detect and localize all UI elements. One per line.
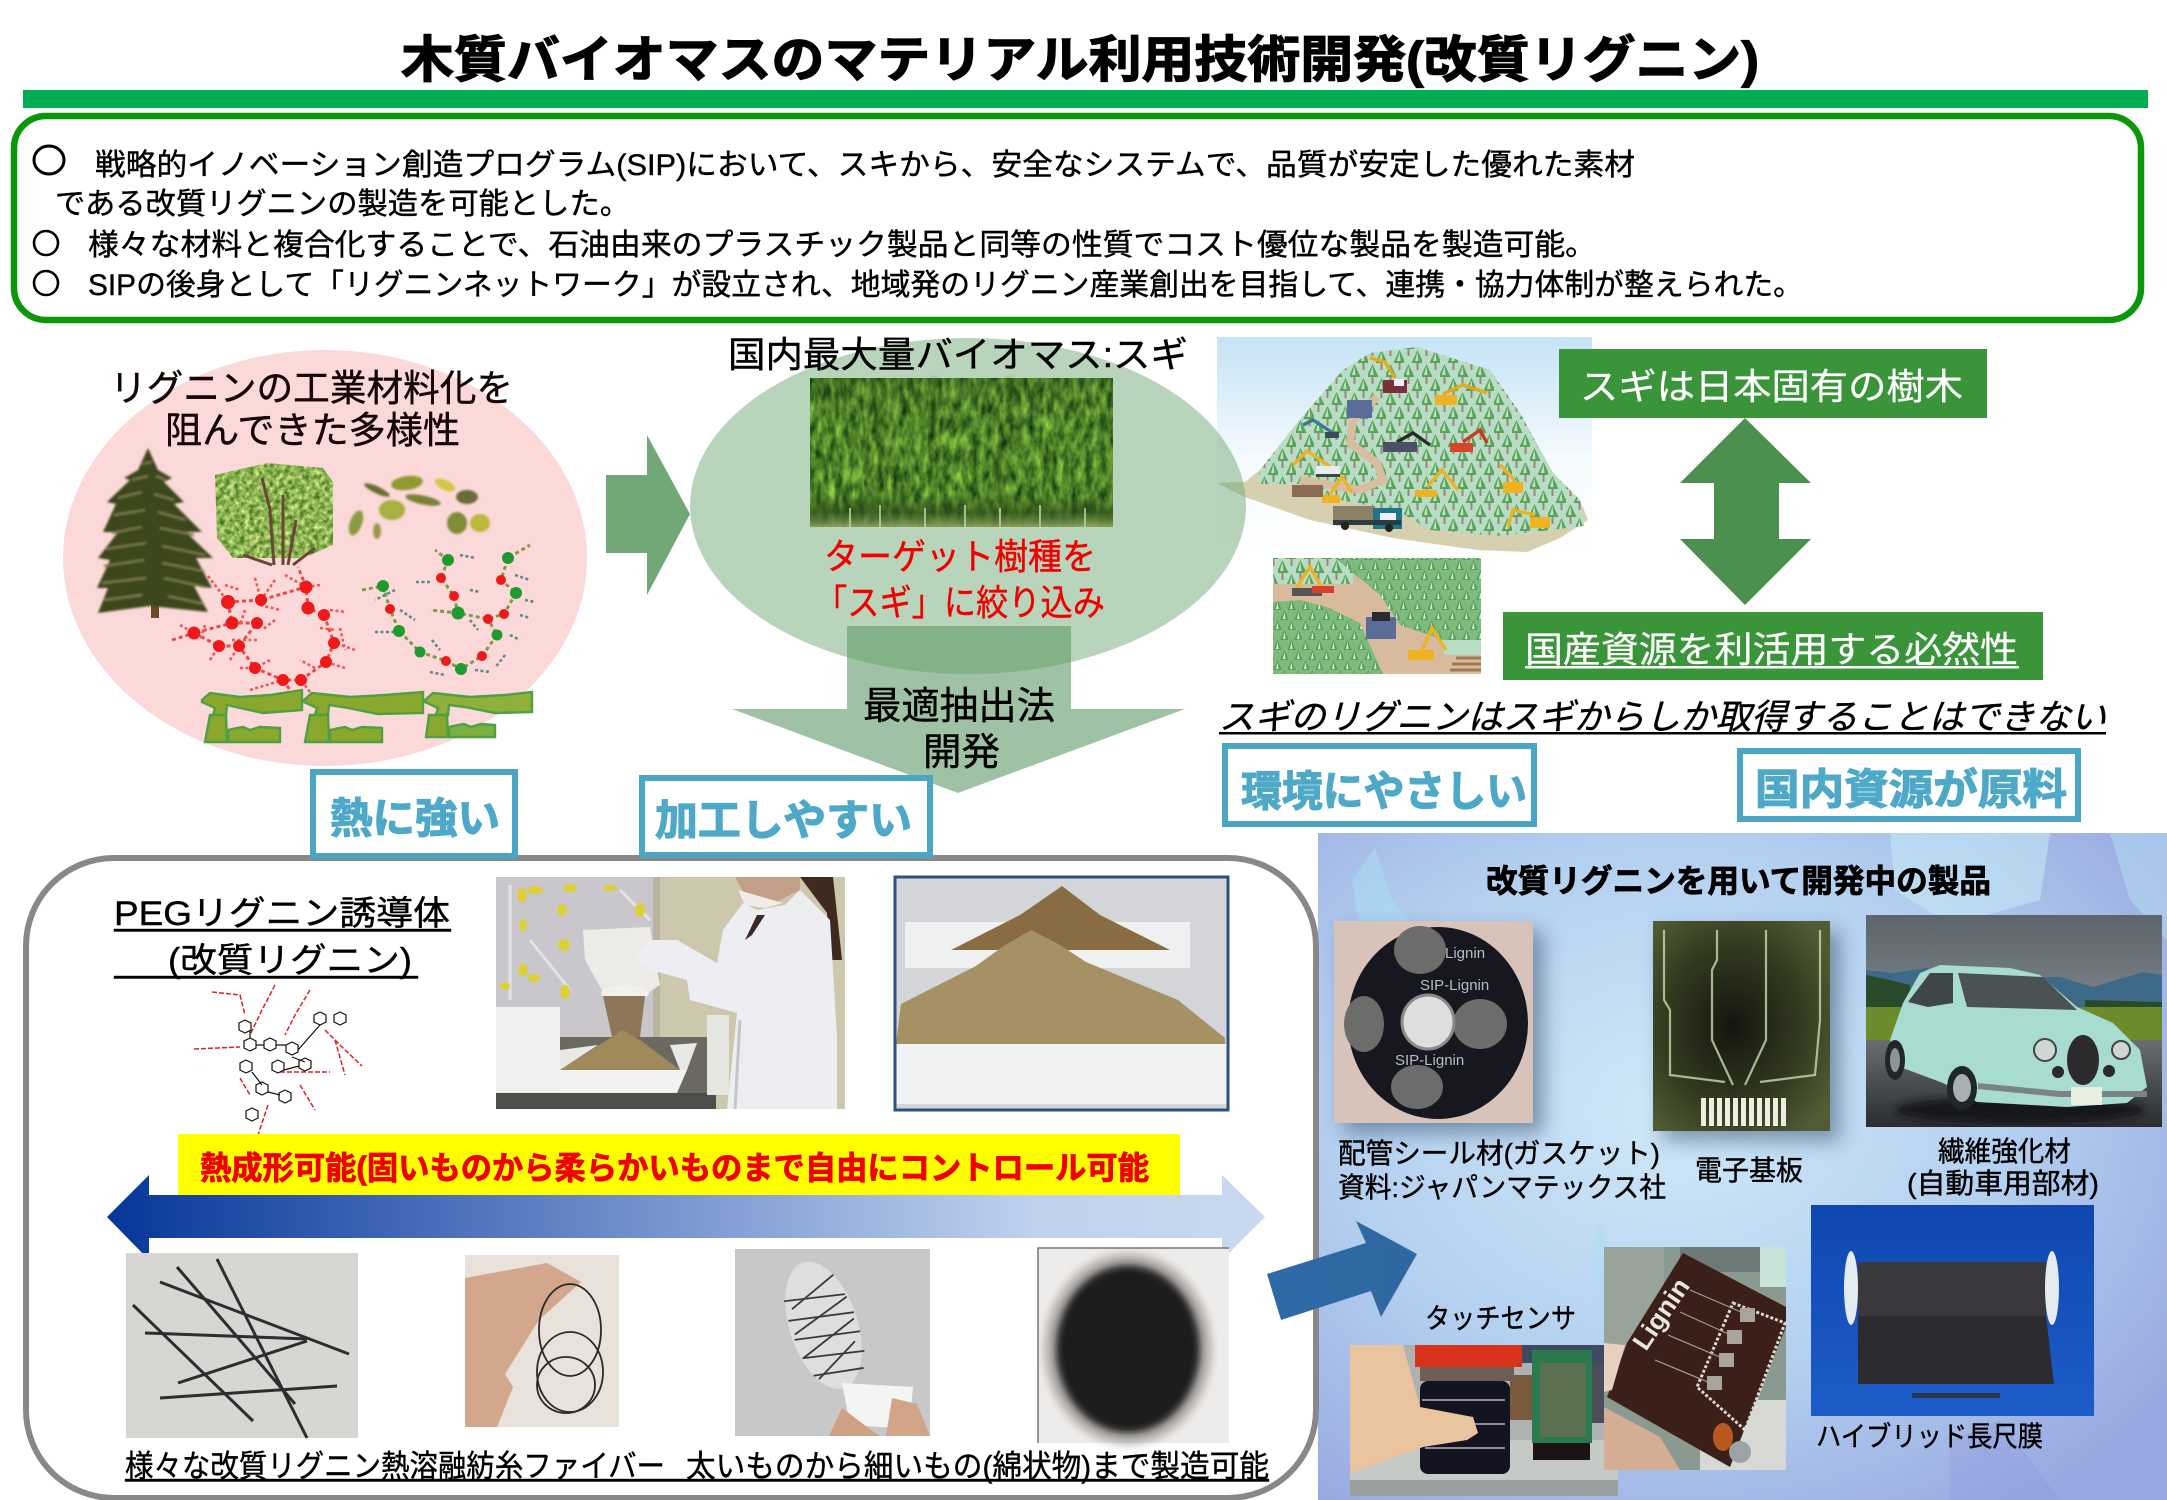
arrow: to Sugi <box>606 435 690 595</box>
photo: short fibers <box>126 1253 358 1438</box>
truck <box>1333 506 1402 532</box>
caption: fibers <box>125 1449 1269 1484</box>
photo shadows <box>1344 931 1840 1141</box>
arrow: extraction method: 開発 <box>923 732 1000 774</box>
diversity heading: 阻んできた多様性 <box>165 410 460 451</box>
tag: heat resistant: 熱に強い <box>330 795 500 842</box>
title: 木質バイオマスのマテリアル利用技術開発(改質リグニン) <box>401 32 1759 88</box>
photo: lignin powder <box>895 877 1228 1110</box>
icon: factories <box>202 690 532 742</box>
label: gasket: 資料:ジャパンマテックス社 <box>1338 1172 1666 1203</box>
panel: products <box>1318 833 2167 1500</box>
arrow: gradient double arrow <box>107 1175 1265 1260</box>
panel: PEG lignin <box>26 858 1316 1498</box>
arrow: to products <box>1267 1221 1417 1320</box>
panel: sugi biomass <box>690 334 1246 674</box>
label: fiber reinforced: 繊維強化材 <box>1938 1136 2071 1167</box>
label: Sugi is native: スギは日本固有の樹木 <box>1580 366 1963 407</box>
arrow: extraction method <box>732 626 1185 793</box>
label: film: ハイブリッド長尺膜 <box>1816 1421 2043 1452</box>
icon: broadleaf tree <box>215 463 333 565</box>
illustration: forestry mountain <box>1217 337 1592 555</box>
tag: easy to process: 加工しやすい <box>655 797 912 844</box>
photo: Lignin sensor sheet <box>1604 1247 1786 1470</box>
title rule <box>23 90 2148 108</box>
panel: summary <box>14 116 2141 320</box>
photo: gasket: SIP-Lignin <box>1420 977 1489 994</box>
photo: cedar forest <box>810 378 1113 527</box>
target species text <box>815 536 1105 623</box>
tag: domestic raw material: 国内資源が原料 <box>1755 766 2067 813</box>
label: touch sensor: タッチセンサ <box>1425 1303 1576 1334</box>
label: necessity of domestic resources <box>1503 612 2043 680</box>
photo: Lignin sensor sheet: Lignin <box>1626 1272 1696 1355</box>
label: gasket <box>1338 1138 1666 1203</box>
panel: diversity <box>63 350 587 766</box>
bullet text 3: SIPの後身として「リグニンネットワーク」が設立され、地域発のリグニン産業創出を目指して、連携・協力体制が整えられた。 <box>88 269 1803 302</box>
photo: gasket <box>1334 921 1533 1123</box>
label: Sugi is native <box>1559 349 1987 418</box>
tag: environmentally friendly <box>1225 746 1534 824</box>
photo: cotton-like fiber <box>1038 1248 1229 1445</box>
heading: PEG lignin derivative: (改質リグニン) <box>168 942 412 980</box>
heading: products: 改質リグニンを用いて開発中の製品 <box>1486 863 1991 899</box>
photo: gasket: Lignin <box>1445 945 1485 962</box>
diversity heading <box>110 368 513 451</box>
photo: gasket: SIP-Lignin <box>1395 1052 1464 1069</box>
photo: mesh tube <box>735 1249 930 1436</box>
heading: PEG lignin derivative: PEGリグニン誘導体 <box>114 895 450 933</box>
bullet text 1 <box>34 146 1635 221</box>
callout: thermoformable: 熱成形可能(固いものから柔らかいものまで自由にコントロール可能 <box>200 1150 1149 1186</box>
photo: car <box>1866 915 2162 1127</box>
icon: leaves <box>346 474 490 539</box>
caption: fibers: 様々な改質リグニン熱溶融紡糸ファイバー <box>125 1449 665 1484</box>
diversity heading: リグニンの工業材料化を <box>110 368 513 409</box>
chart: molecule structure <box>194 985 362 1135</box>
illustration: forest road <box>1273 558 1481 674</box>
tag: environmentally friendly: 環境にやさしい <box>1241 768 1527 815</box>
tag: easy to process <box>642 778 930 855</box>
photo: circuit board <box>1653 921 1830 1131</box>
bullet text 2: 様々な材料と複合化することで、石油由来のプラスチック製品と同等の性質でコスト優位な製品を製造可能。 <box>88 229 1596 262</box>
icon: conifer tree <box>97 448 213 618</box>
label: fiber reinforced: (自動車用部材) <box>1907 1168 2099 1199</box>
machines <box>1293 358 1535 527</box>
tag: domestic raw material <box>1740 751 2078 819</box>
photo: touch sensor jar <box>1350 1345 1618 1496</box>
statement: lignin only from Sugi: スギのリグニンはスギからしか取得することはできない <box>1219 698 2106 737</box>
heading: PEG lignin derivative <box>114 895 451 980</box>
target species text: 「スギ」に絞り込み <box>815 582 1105 623</box>
arrow: extraction method: 最適抽出法 <box>863 686 1055 728</box>
icon: red lignin molecule <box>172 567 355 692</box>
arrow: double vertical <box>1680 418 1811 605</box>
caption: fibers: 太いものから細いもの(綿状物)まで製造可能 <box>686 1449 1269 1484</box>
label: necessity of domestic resources: 国産資源を利活用する必然性 <box>1525 629 2018 670</box>
background crystals <box>1352 833 2167 1500</box>
label: board: 電子基板 <box>1695 1155 1803 1186</box>
photo: hybrid film <box>1811 1205 2094 1416</box>
callout: thermoformable <box>178 1134 1180 1195</box>
label: gasket: 配管シール材(ガスケット) <box>1338 1138 1660 1169</box>
bullet text 1: 戦略的イノベーション創造プログラム(SIP)において、スキから、安全なシステムで、品質が安定した優れた素材 <box>95 149 1635 182</box>
tag: heat resistant <box>313 772 515 856</box>
label: fiber reinforced <box>1907 1136 2099 1199</box>
bullet text 1: である改質リグニンの製造を可能とした。 <box>55 188 630 221</box>
icon: green lignin molecule <box>362 545 535 675</box>
heading: domestic biomass: 国内最大量バイオマス:スギ <box>728 334 1188 375</box>
photo: lab worker <box>496 877 845 1109</box>
photo: fiber loop <box>465 1255 619 1427</box>
target species text: ターゲット樹種を <box>824 536 1096 577</box>
